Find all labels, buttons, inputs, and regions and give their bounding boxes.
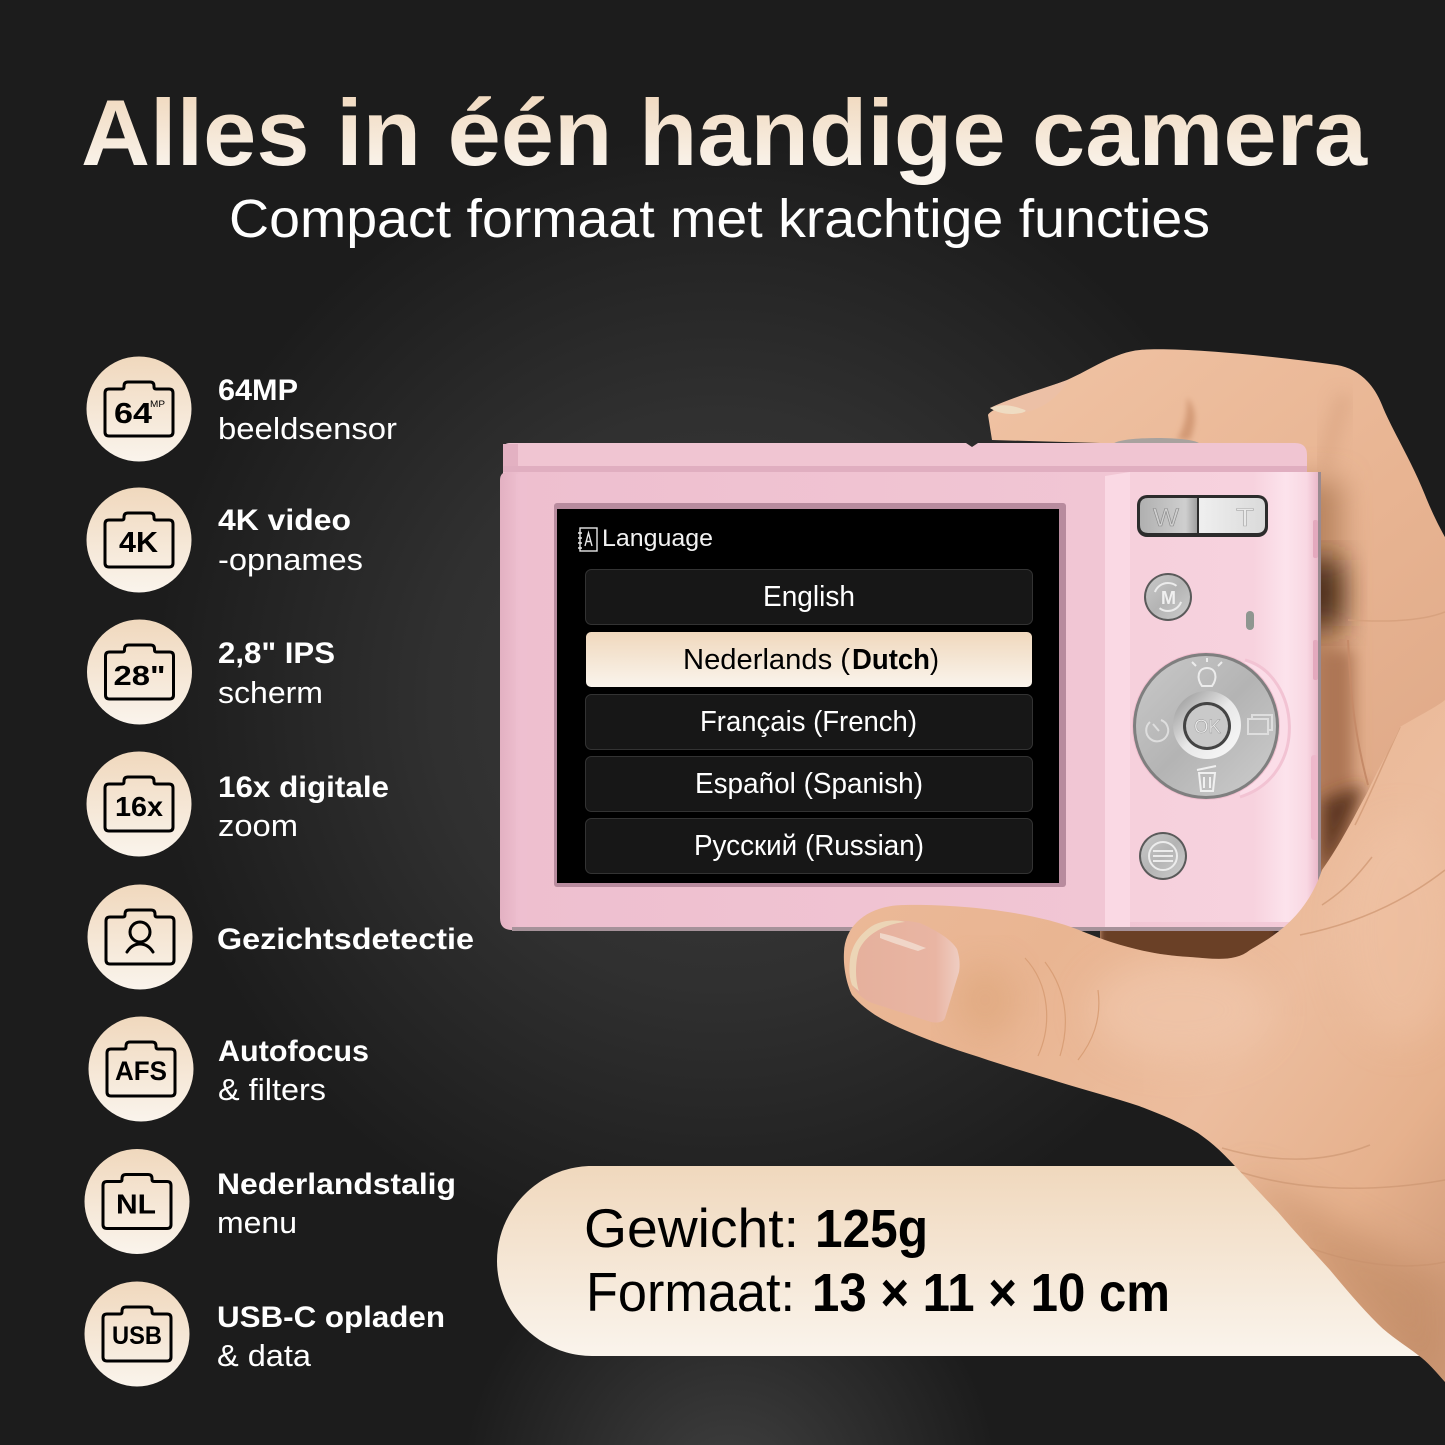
text: Autofocus: Autofocus [218,1035,369,1068]
option: Dutch selected: ) [930,644,939,676]
text: weight [584,1197,928,1259]
icon: AFS camera: AFS [115,1056,167,1086]
zoom rocker W T: T [1236,504,1254,532]
icon: NL camera: NL [116,1188,156,1220]
text: 64MP: 64MP [218,374,298,407]
option: French: Français (French) [700,706,917,738]
button menu [1139,832,1187,880]
panel: weight and size [497,1166,1445,1356]
text: size [586,1261,1170,1323]
icon: 64MP camera [86,356,192,462]
directional pad [1132,652,1289,800]
main body [500,472,1320,930]
option: Spanish: Español (Spanish) [695,768,923,800]
status LED [1246,611,1254,630]
top plate [503,443,1307,474]
option: Dutch selected: Nederlands ( [683,644,850,676]
text: size: Formaat: [586,1261,795,1323]
text: filters: & filters [218,1072,326,1107]
text: beeldsensor: beeldsensor [218,411,397,446]
text: weight: Gewicht: [584,1197,799,1259]
subtitle: Compact formaat met krachtige functies [229,189,1210,249]
camera body [500,438,1321,931]
text: Gezichtsdetectie: Gezichtsdetectie [217,923,474,956]
icon: USB camera: USB [112,1322,162,1350]
text: 2,8 IPS: 2,8" IPS [218,637,335,670]
center ok ring [1173,691,1241,759]
feature: 2,8 inch IPS [87,620,335,724]
icon: AFS camera [88,1016,194,1122]
icon: 64MP camera: MP [150,399,165,409]
icon: fingernail on top finger [990,380,1068,413]
text: menu: menu [217,1205,297,1240]
icon: 4K camera [86,488,192,592]
hand: thumb and palm [844,700,1445,1400]
text: 4K video: 4K video [218,504,351,537]
option: English: English [763,581,855,613]
option: Dutch selected: Dutch [852,644,930,676]
icon: slideshow [1248,715,1272,734]
option: English [586,570,1032,624]
text: Nederlandstalig: Nederlandstalig [217,1168,456,1201]
title: Alles in één handige camera [81,80,1368,185]
icon: 4K camera: 4K [119,527,158,559]
icon: 28 inch camera: 28" [114,660,166,691]
text: 16x digitale: 16x digitale [218,771,389,804]
text: data: & data [217,1338,312,1373]
menu heading: Language [602,525,713,552]
option: Spanish [586,756,1032,812]
icon: USB camera [84,1282,190,1386]
icon: flash bulb [1192,658,1222,686]
feature: 16x zoom [86,752,389,856]
icon: face camera [88,884,192,990]
button M: M [1161,588,1176,608]
icon: thumb nail [849,920,960,1023]
icon: OK label: OK [1194,717,1221,738]
option: Russian [586,818,1032,874]
zoom rocker W T [1137,495,1268,537]
feature: 4K video [86,488,363,592]
icon: timer [1146,720,1168,741]
text: -opnames: -opnames [218,542,363,577]
option: Dutch selected [586,632,1032,687]
text: weight: 125g [815,1199,928,1259]
icon: 16x camera [86,752,192,856]
feature: 64MP sensor [86,356,397,462]
feature: autofocus [88,1016,369,1122]
screen [554,503,1066,887]
icon: 28 inch camera [87,620,192,724]
text: USB-C opladen: USB-C opladen [217,1301,445,1334]
feature: face detection [88,884,474,990]
icon: language book [578,528,597,551]
hand: fingers behind camera [988,349,1445,980]
option: Russian: Русский (Russian) [694,830,924,862]
icon: NL camera [84,1149,190,1254]
icon: 64MP camera: 64 [114,398,152,430]
button M [1144,573,1192,621]
option: French [586,694,1032,750]
feature: Dutch menu [84,1149,456,1254]
icon: 16x camera: 16x [115,791,163,822]
zoom rocker W T: W [1153,504,1179,532]
top shutter button [1113,438,1200,444]
feature: USB-C [84,1282,445,1386]
text: zoom: zoom [218,808,298,843]
text: scherm: scherm [218,675,323,710]
text: size: 13 × 11 × 10 cm [812,1263,1170,1323]
icon: trash [1197,766,1216,791]
